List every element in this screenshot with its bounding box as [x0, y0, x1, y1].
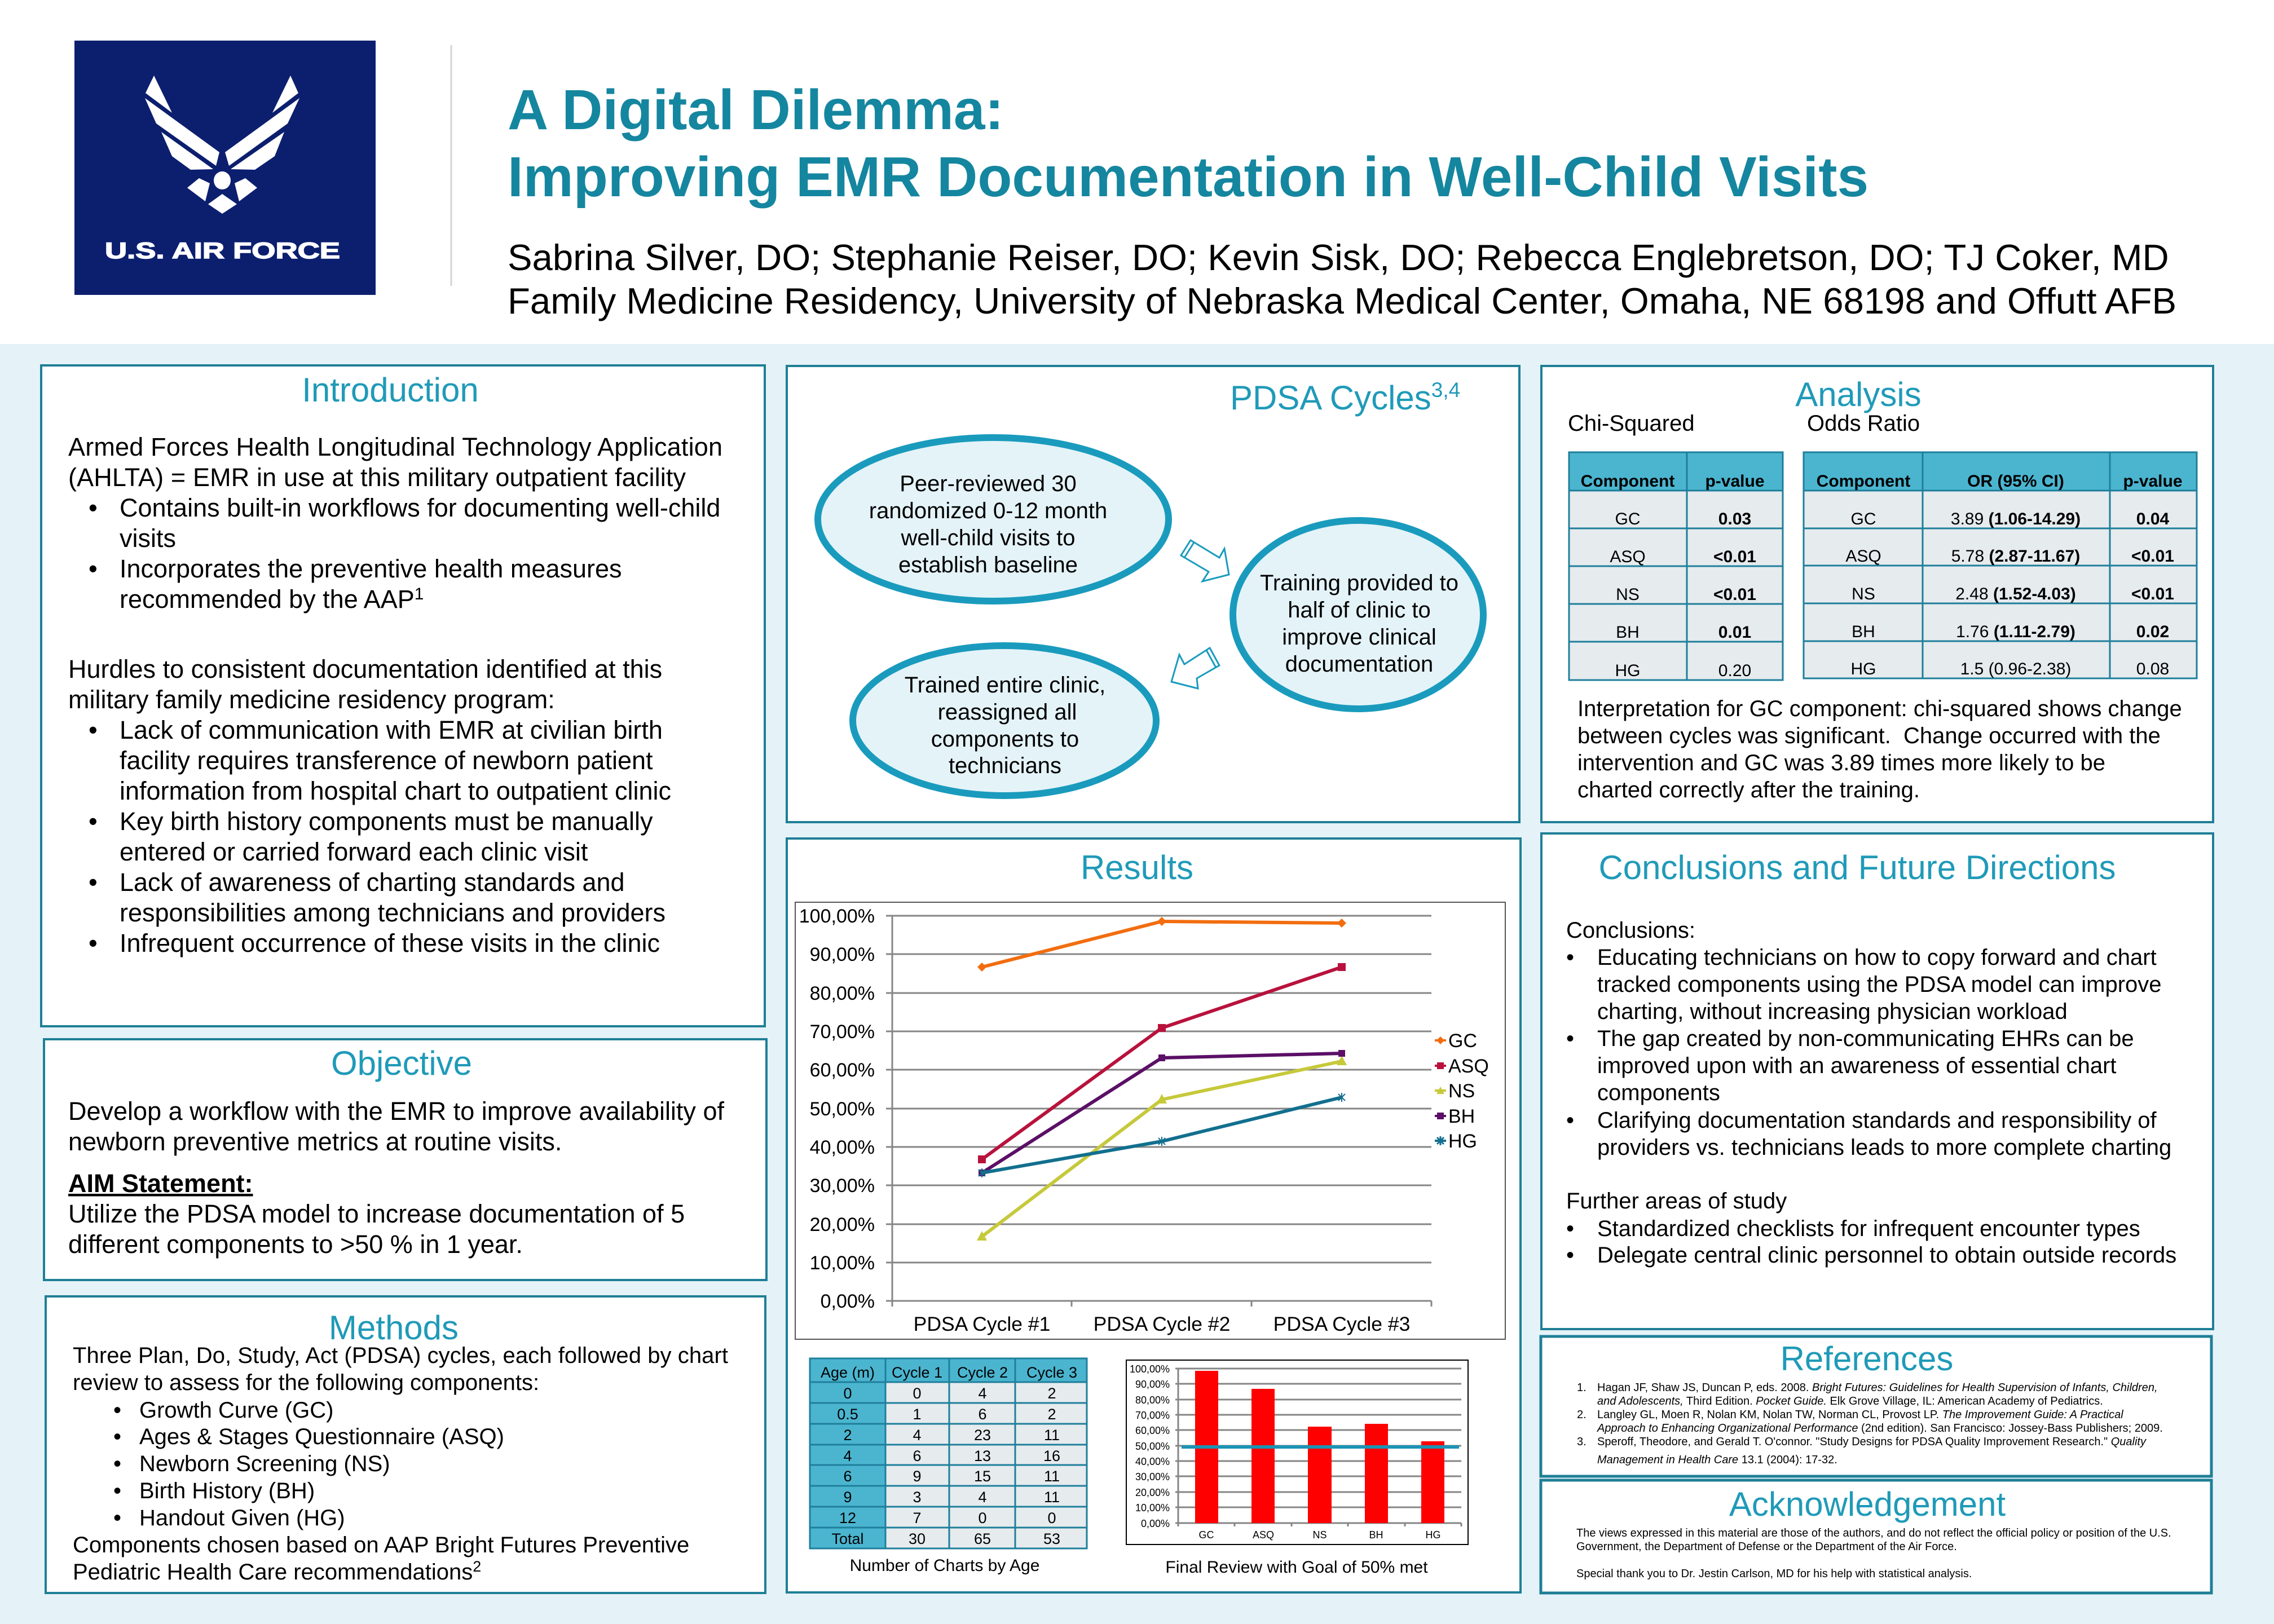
- table: odds ratio: BH: [1852, 623, 1875, 641]
- heading: PDSA cycles: PDSA Cycles: [1230, 379, 1431, 417]
- line chart: documentation by PDSA cycle: 70,00%: [810, 1021, 875, 1043]
- table: chi-squared: BH: [1616, 623, 1640, 642]
- legend: ASQ: [1448, 1056, 1489, 1077]
- text block: methods description: review to assess for the following components:: [73, 1370, 539, 1395]
- table: number of charts by age: 6: [913, 1448, 922, 1464]
- line chart: documentation by PDSA cycle: PDSA Cycle #3: [1273, 1313, 1410, 1335]
- text block: methods description: •: [113, 1398, 121, 1423]
- table: number of charts by age: 30: [909, 1530, 926, 1547]
- table: chi-squared: Component: [1581, 472, 1674, 491]
- text block: conclusions: charting, without increasing physician workload: [1597, 999, 2068, 1024]
- text block: interpretation: [1577, 696, 2182, 802]
- table: number of charts by age: 0: [843, 1385, 852, 1402]
- text block: objective statement: [68, 1097, 724, 1156]
- panel: introduction: [41, 365, 765, 1026]
- bar chart: final review with 50% goal: [1126, 1360, 1468, 1544]
- text block: documentation hurdles: Hurdles to consistent documentation identified at this: [68, 655, 662, 683]
- table: number of charts by age: Cycle 2: [957, 1364, 1008, 1381]
- text block: further areas of study: [1566, 1189, 2176, 1268]
- text block: interpretation: charted correctly after the training.: [1577, 778, 1920, 802]
- table: number of charts by age: 2: [1047, 1385, 1056, 1402]
- panel: acknowledgement: [1541, 1480, 2211, 1593]
- cycle 2 ellipse: half of clinic to: [1288, 598, 1431, 623]
- table: chi-squared: <0.01: [1713, 548, 1756, 566]
- table: odds ratio: 0.04: [2136, 510, 2170, 528]
- bar chart: final review with 50% goal: 50,00%: [1135, 1441, 1170, 1452]
- table: number of charts by age: Total: [831, 1530, 864, 1547]
- text block: conclusions: providers vs. technicians leads to more complete charting: [1597, 1135, 2171, 1160]
- table: number of charts by age: 4: [843, 1448, 852, 1464]
- text block: further areas of study: Delegate central clinic personnel to obtain outside records: [1597, 1243, 2176, 1268]
- table: number of charts by age: Age (m): [821, 1364, 875, 1381]
- heading: acknowledgement: Acknowledgement: [1729, 1485, 2006, 1523]
- series: ASQ: [978, 963, 1346, 1163]
- text block: AHLTA description: visits: [120, 524, 176, 553]
- table: number of charts by age: 2: [843, 1427, 852, 1444]
- panel: PDSA cycles: [787, 366, 1519, 822]
- cycle 2 ellipse: Training provided to: [1260, 571, 1458, 595]
- table: number of charts by age: 65: [974, 1530, 991, 1547]
- table: number of charts by age: 1: [913, 1406, 922, 1423]
- line chart: documentation by PDSA cycle: 20,00%: [810, 1214, 875, 1235]
- text block: disclaimer: Government, the Department of Defense or the Department of the Air Force.: [1576, 1541, 1957, 1553]
- table: number of charts by age: 6: [843, 1468, 852, 1485]
- text block: documentation hurdles: facility requires transference of newborn patient: [120, 746, 653, 775]
- text block: reference list: Management in Health Care 13.1 (2004): 17-32.: [1597, 1454, 1837, 1466]
- text block: AHLTA description: (AHLTA) = EMR in use at this military outpatient facility: [68, 463, 686, 492]
- bar chart: final review with 50% goal: ASQ: [1253, 1529, 1274, 1541]
- text block: documentation hurdles: entered or carried forward each clinic visit: [120, 837, 588, 866]
- bar chart: final review with 50% goal: 10,00%: [1135, 1502, 1170, 1513]
- table: number of charts by age: 9: [913, 1468, 922, 1485]
- table: number of charts by age: 2: [1047, 1406, 1056, 1423]
- bar chart: final review with 50% goal: 70,00%: [1135, 1410, 1170, 1421]
- text block: methods description: •: [113, 1424, 121, 1449]
- label: chi-squared: Chi-Squared: [1568, 411, 1695, 436]
- text block: AHLTA description: 1: [415, 585, 424, 603]
- table: number of charts by age: 6: [978, 1406, 987, 1423]
- title: Improving EMR Documentation in Well-Child Visits: [508, 145, 1868, 209]
- table: odds ratio: OR (95% CI): [1967, 472, 2064, 491]
- panel: conclusions and future directions: [1541, 833, 2213, 1329]
- line chart: documentation by PDSA cycle: 10,00%: [810, 1252, 875, 1274]
- heading: objective: Objective: [331, 1044, 472, 1082]
- table: number of charts by age: 12: [839, 1510, 856, 1526]
- text block: methods description: Ages & Stages Questionnaire (ASQ): [139, 1424, 504, 1449]
- text block: AHLTA description: •: [89, 493, 98, 522]
- text block: methods description: Birth History (BH): [139, 1479, 315, 1503]
- table: odds ratio: p-value: [2123, 472, 2183, 491]
- table: number of charts by age: 23: [974, 1427, 991, 1444]
- text block: further areas of study: Standardized checklists for infrequent encounter types: [1597, 1216, 2140, 1241]
- text block: methods description: 2: [473, 1558, 481, 1575]
- table: odds ratio: <0.01: [2131, 547, 2174, 566]
- cycle 1 ellipse: [818, 438, 1169, 601]
- text block: reference list: Langley GL, Moen R, Nolan KM, Nolan TW, Norman CL, Provost LP. The Improvement Guide: A Practical: [1597, 1409, 2123, 1421]
- line chart: documentation by PDSA cycle: 100,00%: [799, 906, 875, 927]
- text block: reference list: Hagan JF, Shaw JS, Duncan P, eds. 2008. Bright Futures: Guidelines for Health Supervision of Infants, Children,: [1597, 1382, 2158, 1394]
- text block: AHLTA description: recommended by the AAP: [120, 585, 415, 614]
- text block: AHLTA description: Contains built-in workflows for documenting well-child: [120, 493, 720, 522]
- table: chi-squared: p-value: [1705, 472, 1765, 491]
- legend: HG: [1448, 1131, 1477, 1152]
- panel: results: [787, 839, 1521, 1592]
- heading: introduction: Introduction: [302, 371, 479, 409]
- table: number of charts by age: 4: [978, 1489, 987, 1506]
- title: [508, 78, 1868, 209]
- text block: documentation hurdles: Key birth history components must be manually: [120, 807, 653, 836]
- title: A Digital Dilemma:: [508, 78, 1004, 142]
- authors and affiliation: [508, 237, 2176, 321]
- table: odds ratio: 5.78 (2.87-11.67): [1951, 547, 2080, 566]
- text block: methods description: Newborn Screening (NS): [139, 1451, 390, 1476]
- text block: reference list: 2.: [1577, 1409, 1586, 1421]
- table: number of charts by age: 3: [913, 1489, 922, 1506]
- text block: conclusions: improved upon with an awareness of essential chart: [1597, 1053, 2117, 1078]
- cycle 1 ellipse: randomized 0-12 month: [869, 498, 1107, 523]
- table: number of charts by age: 13: [974, 1448, 991, 1464]
- table: chi-squared: NS: [1616, 585, 1640, 604]
- caption: final review: Final Review with Goal of 50% met: [1165, 1558, 1428, 1577]
- bar chart: final review with 50% goal: 40,00%: [1135, 1456, 1170, 1467]
- legend: BH: [1448, 1106, 1475, 1127]
- label: odds ratio: Odds Ratio: [1807, 411, 1920, 436]
- table: odds ratio: ASQ: [1845, 547, 1881, 566]
- table: number of charts by age: 0.5: [837, 1406, 858, 1423]
- line chart: documentation by PDSA cycle: 30,00%: [810, 1175, 875, 1197]
- bar chart: final review with 50% goal: HG: [1426, 1529, 1440, 1541]
- legend: GC: [1448, 1030, 1477, 1052]
- line chart: documentation by PDSA cycle: 80,00%: [810, 983, 875, 1004]
- cycle 3 ellipse: reassigned all: [938, 700, 1077, 725]
- text block: documentation hurdles: Lack of awareness of charting standards and: [120, 868, 625, 897]
- text block: conclusions: •: [1566, 945, 1574, 970]
- cycle 2 ellipse: documentation: [1285, 652, 1433, 677]
- table: odds ratio: 1.5 (0.96-2.38): [1960, 660, 2071, 678]
- text block: further areas of study: Further areas of study: [1566, 1189, 1787, 1213]
- table: chi-squared: <0.01: [1713, 585, 1756, 604]
- table: number of charts by age: 7: [913, 1510, 922, 1526]
- line chart: documentation by PDSA cycle: 40,00%: [810, 1137, 875, 1158]
- bar chart: final review with 50% goal: 60,00%: [1135, 1425, 1170, 1436]
- text block: disclaimer: The views expressed in this material are those of the authors, and do not reflect the official policy or position of the U.S.: [1576, 1527, 2171, 1539]
- line chart: documentation by PDSA cycle: 90,00%: [810, 944, 875, 965]
- text block: interpretation: intervention and GC was 3.89 times more likely to be: [1577, 751, 2105, 775]
- text block: methods description: [73, 1343, 728, 1585]
- table: number of charts by age: Cycle 3: [1026, 1364, 1077, 1381]
- text block: documentation hurdles: •: [89, 807, 98, 836]
- table: number of charts by age: 11: [1044, 1427, 1060, 1444]
- line chart: documentation by PDSA cycle: 0,00%: [821, 1291, 875, 1312]
- text block: reference list: 3.: [1577, 1436, 1586, 1448]
- text block: methods description: Pediatric Health Care recommendations: [73, 1560, 473, 1585]
- bar chart: final review with 50% goal: 0,00%: [1141, 1518, 1170, 1529]
- text block: documentation hurdles: Infrequent occurrence of these visits in the clinic: [120, 929, 660, 957]
- cycle 1 ellipse: Peer-reviewed 30: [900, 471, 1077, 496]
- cycle 3 ellipse: technicians: [949, 753, 1061, 778]
- text block: AIM statement: AIM Statement:: [68, 1169, 253, 1198]
- bar chart: final review with 50% goal: 90,00%: [1135, 1379, 1170, 1390]
- cycle 2 ellipse: [1233, 520, 1483, 709]
- table: number of charts by age: 4: [913, 1427, 922, 1444]
- text block: documentation hurdles: •: [89, 868, 98, 897]
- table: number of charts by age: Cycle 1: [892, 1364, 942, 1381]
- text block: documentation hurdles: responsibilities among technicians and providers: [120, 898, 666, 927]
- heading: analysis: Analysis: [1795, 376, 1922, 413]
- cycle 3 ellipse: Trained entire clinic,: [905, 673, 1105, 698]
- text block: AIM statement: Utilize the PDSA model to increase documentation of 5: [68, 1199, 685, 1228]
- text block: documentation hurdles: [68, 655, 671, 957]
- text block: AIM statement: different components to >50 % in 1 year.: [68, 1230, 523, 1259]
- text block: AHLTA description: •: [89, 554, 98, 583]
- table: chi-squared: 0.20: [1718, 661, 1751, 680]
- table: number of charts by age: 16: [1043, 1448, 1060, 1464]
- header: U.S. Air Force logo: [74, 41, 376, 295]
- table: odds ratio: [1804, 452, 2197, 678]
- table: odds ratio: 2.48 (1.52-4.03): [1955, 585, 2076, 603]
- heading: results: Results: [1081, 849, 1193, 886]
- panel: references: [1541, 1336, 2211, 1476]
- text block: reference list: and Adolescents, Third Edition. Pocket Guide. Elk Grove Village, IL: American Academy of Pediatrics.: [1597, 1395, 2103, 1407]
- bar chart: final review with 50% goal: 80,00%: [1135, 1394, 1170, 1406]
- text block: methods description: •: [113, 1506, 121, 1530]
- line chart: documentation by PDSA cycle: 60,00%: [810, 1060, 875, 1081]
- authors and affiliation: Sabrina Silver, DO; Stephanie Reiser, DO; Kevin Sisk, DO; Rebecca Englebretson, DO; TJ Coker, MD: [508, 237, 2169, 278]
- legend: [1435, 1030, 1489, 1152]
- table: chi-squared: [1569, 452, 1783, 680]
- bar chart: final review with 50% goal: GC: [1199, 1529, 1214, 1541]
- text block: reference list: Speroff, Theodore, and Gerald T. O'connor. "Study Designs for PDSA Quality Improvement Research." Quality: [1597, 1436, 2147, 1448]
- text block: interpretation: between cycles was significant. Change occurred with the: [1577, 723, 2161, 748]
- line chart: documentation by PDSA cycle: [795, 902, 1505, 1339]
- bar chart: final review with 50% goal: BH: [1369, 1529, 1383, 1541]
- table: odds ratio: Component: [1817, 472, 1910, 491]
- cycle 3 ellipse: [853, 646, 1156, 796]
- text block: documentation hurdles: •: [89, 716, 98, 744]
- table: number of charts by age: 9: [843, 1489, 852, 1506]
- heading: PDSA cycles: 3,4: [1431, 378, 1460, 401]
- text block: documentation hurdles: •: [89, 929, 98, 957]
- text block: conclusions: Conclusions:: [1566, 918, 1695, 943]
- text block: methods description: Handout Given (HG): [139, 1506, 345, 1530]
- legend: NS: [1448, 1080, 1475, 1102]
- table: number of charts by age: 11: [1044, 1489, 1060, 1506]
- text block: methods description: Components chosen based on AAP Bright Futures Preventive: [73, 1533, 689, 1557]
- text block: conclusions: Educating technicians on how to copy forward and chart: [1597, 945, 2157, 970]
- authors and affiliation: Family Medicine Residency, University of Nebraska Medical Center, Omaha, NE 68198 and Offutt AFB: [508, 280, 2176, 321]
- text block: conclusions: The gap created by non-communicating EHRs can be: [1597, 1026, 2134, 1051]
- caption: number of charts by age: Number of Charts by Age: [850, 1556, 1039, 1575]
- table: chi-squared: ASQ: [1610, 548, 1646, 566]
- table: odds ratio: <0.01: [2131, 585, 2174, 603]
- header: U.S. Air Force logo: U.S. AIR FORCE: [105, 239, 340, 263]
- bar chart: final review with 50% goal: 100,00%: [1130, 1363, 1170, 1375]
- cycle 1 ellipse: establish baseline: [898, 553, 1078, 577]
- heading: references: References: [1781, 1340, 1953, 1378]
- cycle 2 ellipse: improve clinical: [1282, 625, 1436, 650]
- cycle 3 ellipse: components to: [931, 727, 1079, 752]
- panel: objective: [44, 1039, 766, 1280]
- table: number of charts by age: [810, 1358, 1087, 1548]
- cycle 1 ellipse: well-child visits to: [901, 526, 1075, 550]
- text block: methods description: Growth Curve (GC): [139, 1398, 334, 1423]
- text block: AIM statement: [68, 1169, 685, 1259]
- text block: methods description: •: [113, 1451, 121, 1476]
- text block: objective statement: newborn preventive metrics at routine visits.: [68, 1127, 562, 1156]
- panel: methods: [46, 1296, 765, 1593]
- table: chi-squared: 0.03: [1718, 510, 1751, 528]
- bar chart: final review with 50% goal: NS: [1312, 1529, 1327, 1541]
- arrow: cycle 2 to cycle 3: [1171, 648, 1219, 689]
- heading: conclusions and future directions: Conclusions and Future Directions: [1598, 849, 2116, 886]
- series: NS: [977, 1056, 1347, 1241]
- text block: AHLTA description: [68, 433, 722, 614]
- table: chi-squared: GC: [1615, 510, 1640, 528]
- text block: reference list: Approach to Enhancing Organizational Performance (2nd edition). San Francisco: Jossey-Bass Publishers; 2009.: [1597, 1422, 2163, 1435]
- bar chart: final review with 50% goal: 20,00%: [1135, 1487, 1170, 1498]
- table: chi-squared: 0.01: [1718, 623, 1751, 642]
- text block: interpretation: Interpretation for GC component: chi-squared shows change: [1577, 696, 2182, 721]
- text block: AHLTA description: Incorporates the preventive health measures: [120, 554, 622, 583]
- table: odds ratio: 3.89 (1.06-14.29): [1951, 510, 2081, 528]
- text block: methods description: Three Plan, Do, Study, Act (PDSA) cycles, each followed by chart: [73, 1343, 728, 1368]
- arrow: cycle 1 to cycle 2: [1181, 540, 1229, 581]
- text block: documentation hurdles: information from hospital chart to outpatient clinic: [120, 776, 671, 805]
- text block: methods description: •: [113, 1479, 121, 1503]
- text block: conclusions: •: [1566, 1108, 1574, 1133]
- series: BH: [979, 1050, 1345, 1176]
- heading: methods: Methods: [329, 1309, 459, 1347]
- line chart: documentation by PDSA cycle: PDSA Cycle #2: [1094, 1313, 1230, 1335]
- text block: disclaimer: [1576, 1527, 2171, 1553]
- panel: analysis: [1541, 366, 2213, 822]
- table: number of charts by age: 53: [1043, 1530, 1060, 1547]
- series: HG: [979, 1093, 1345, 1177]
- text block: documentation hurdles: Lack of communication with EMR at civilian birth: [120, 716, 663, 744]
- table: number of charts by age: 0: [978, 1510, 987, 1526]
- text block: conclusions: •: [1566, 1026, 1574, 1051]
- table: number of charts by age: 0: [1047, 1510, 1056, 1526]
- bar chart: final review with 50% goal: 30,00%: [1135, 1471, 1170, 1482]
- table: odds ratio: GC: [1851, 510, 1876, 528]
- text block: documentation hurdles: military family medicine residency program:: [68, 685, 555, 714]
- table: odds ratio: HG: [1851, 660, 1876, 678]
- table: number of charts by age: 0: [913, 1385, 922, 1402]
- table: number of charts by age: 4: [978, 1385, 987, 1402]
- text block: further areas of study: •: [1566, 1243, 1574, 1268]
- line chart: documentation by PDSA cycle: 50,00%: [810, 1098, 875, 1120]
- table: odds ratio: 0.08: [2136, 660, 2169, 678]
- series: GC: [977, 917, 1346, 972]
- table: number of charts by age: 15: [974, 1468, 991, 1485]
- text block: conclusions: tracked components using the PDSA model can improve: [1597, 972, 2162, 997]
- table: odds ratio: 1.76 (1.11-2.79): [1956, 623, 2075, 641]
- text block: further areas of study: •: [1566, 1216, 1574, 1241]
- text block: AHLTA description: Armed Forces Health Longitudinal Technology Application: [68, 433, 722, 461]
- text block: reference list: 1.: [1577, 1382, 1586, 1394]
- line chart: documentation by PDSA cycle: PDSA Cycle #1: [914, 1313, 1050, 1335]
- text block: thanks: Special thank you to Dr. Jestin Carlson, MD for his help with statistical analysis.: [1576, 1568, 1972, 1580]
- text block: conclusions: Clarifying documentation standards and responsibility of: [1597, 1108, 2157, 1133]
- table: odds ratio: 0.02: [2136, 623, 2169, 641]
- text block: objective statement: Develop a workflow with the EMR to improve availability of: [68, 1097, 724, 1126]
- text block: conclusions: [1566, 918, 2171, 1160]
- table: chi-squared: HG: [1615, 661, 1640, 680]
- table: number of charts by age: 11: [1044, 1468, 1060, 1485]
- table: odds ratio: NS: [1852, 585, 1875, 603]
- text block: conclusions: components: [1597, 1080, 1720, 1105]
- text block: reference list: [1577, 1382, 2163, 1466]
